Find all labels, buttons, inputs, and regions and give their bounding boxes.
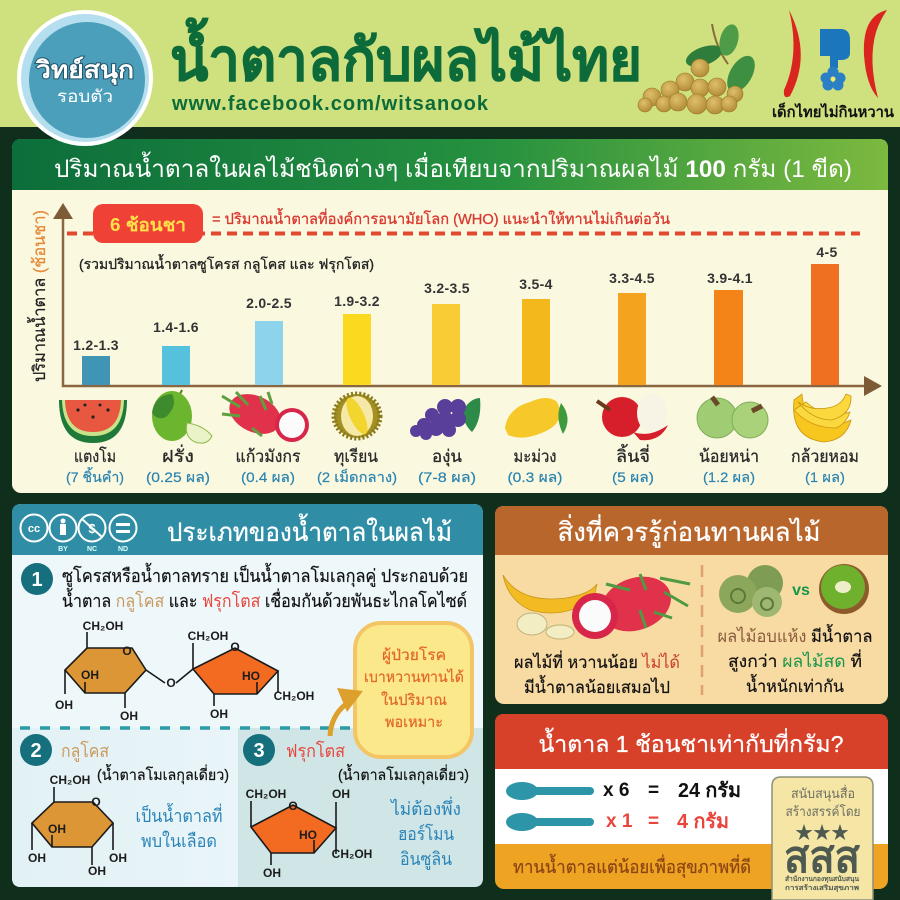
badge: ThaiHealth sponsor: สำนักงานกองทุนสนับสนุน <box>785 875 859 883</box>
chart: glucose structure: OH <box>109 851 127 865</box>
one teaspoon row: = <box>648 811 659 832</box>
badge: ThaiHealth sponsor: สนับสนุนสื่อ <box>791 785 855 802</box>
licence icons: NC <box>87 546 97 553</box>
chart: glucose structure: CH₂OH <box>50 773 90 787</box>
icon: dragon fruit <box>222 386 309 442</box>
chart: glucose structure: O <box>91 795 101 809</box>
licence icons: $ <box>88 521 96 536</box>
number badge 1 <box>21 563 53 595</box>
icon: custard apple <box>697 397 768 438</box>
logo: no sweet for Thai kids <box>772 10 895 121</box>
icon: durian <box>334 394 380 438</box>
fructose description: ไม่ต้องพึ่ง <box>389 796 461 819</box>
chart: fructose structure: HO <box>299 828 317 842</box>
glucose description <box>136 803 222 851</box>
divider <box>20 726 355 730</box>
fruit names and serving sizes: แก้วมังกร <box>236 447 300 466</box>
chart: fructose structure: CH₂OH <box>246 787 286 801</box>
title: น้ำตาลกับผลไม้ไทย <box>170 18 642 93</box>
website url: www.facebook.com/witsanook <box>171 93 489 115</box>
chart: sucrose structure: OH <box>81 668 99 682</box>
icon: lychee <box>597 393 668 440</box>
bar chart: 3.2-3.5 <box>424 280 470 296</box>
limit label: 6 teaspoons <box>93 204 203 243</box>
fructose description: อินซูลิน <box>400 849 452 870</box>
y-axis label: ปริมาณน้ำตาล (ช้อนชา) <box>27 210 49 382</box>
icon: watermelon <box>59 400 127 443</box>
teaspoon header <box>495 714 888 769</box>
chart: glucose structure: OH <box>28 851 46 865</box>
panel: sugar chart <box>12 139 888 493</box>
bar chart: 1.2-1.3 <box>73 337 119 353</box>
footer slogan: ทานน้ำตาลแต่น้อยเพื่อสุขภาพที่ดี <box>513 854 751 878</box>
sucrose description: น้ำตาล กลูโคส และ ฟรุกโตส เชื่อมกันด้วยพันธะไกลโคไซด์ <box>62 588 467 612</box>
fruit names and serving sizes: น้อยหน่า <box>699 447 759 466</box>
badge: ThaiHealth sponsor: การสร้างเสริมสุขภาพ <box>785 883 859 892</box>
number badge 2: 2 <box>30 740 42 762</box>
fruit names and serving sizes: แตงโม <box>74 446 116 466</box>
chart: glucose structure: OH <box>88 864 106 878</box>
chart: sucrose structure <box>55 619 314 723</box>
callout: diabetics <box>355 623 472 757</box>
fruit names and serving sizes: (0.4 ผล) <box>241 469 295 485</box>
heading: types of sugar: ประเภทของน้ำตาลในผลไม้ <box>167 513 452 547</box>
chart: fructose structure: OH <box>263 866 281 880</box>
icon: banana <box>794 394 851 442</box>
fruit names and serving sizes: (1.2 ผล) <box>703 469 755 485</box>
glucose description: พบในเลือด <box>141 830 217 851</box>
badge: ThaiHealth sponsor: สร้างสรรค์โดย <box>786 804 860 819</box>
bar chart: 4-5 <box>816 244 838 260</box>
badge: ThaiHealth sponsor: สสส <box>784 833 860 882</box>
icon: guava <box>152 390 212 443</box>
chart: sucrose structure: CH₂OH <box>188 629 228 643</box>
teaspoon header: น้ำตาล 1 ช้อนชาเท่ากับที่กรัม? <box>538 728 844 757</box>
panel: types of sugar in fruit <box>12 504 483 887</box>
icon: dried fruit <box>719 565 783 617</box>
bar chart: 1.9-3.2 <box>334 293 380 309</box>
callout: diabetics: พอเหมาะ <box>385 714 443 731</box>
callout: diabetics: ในปริมาณ <box>381 691 447 709</box>
chart: glucose structure <box>28 773 127 878</box>
sugar panel header <box>12 504 483 555</box>
glucose note: (น้ำตาลโมเลกุลเดี่ยว) <box>97 764 229 785</box>
chart: glucose structure: OH <box>48 822 66 836</box>
sucrose description <box>62 563 468 612</box>
badge: ThaiHealth sponsor: ★★★ <box>795 823 849 843</box>
licence icons: ND <box>118 546 128 553</box>
logo: witsanook badge: วิทย์สนุก <box>35 56 134 86</box>
WHO limit dashed line <box>67 232 860 236</box>
number badge 3 <box>243 734 275 766</box>
bar chart <box>73 244 839 385</box>
callout: diabetics: ผู้ป่วยโรค <box>382 646 446 664</box>
things-to-know header <box>495 506 888 555</box>
fruit names and serving sizes: (1 ผล) <box>805 469 845 485</box>
six teaspoons row: x 6 <box>603 780 629 801</box>
fruit names and serving sizes: ลิ้นจี่ <box>616 444 650 466</box>
section 3 background <box>238 728 483 887</box>
text: low-sweet fruit: มีน้ำตาลน้อยเสมอไป <box>524 675 670 697</box>
chart: fructose structure: OH <box>332 787 350 801</box>
arrow to callout <box>330 688 363 736</box>
text: dried fruit sugar: น้ำหนักเท่ากัน <box>746 674 844 696</box>
chart: fructose structure: CH₂OH <box>332 847 372 861</box>
chart: sucrose structure: HO <box>242 669 260 683</box>
icon: longan fruit cluster <box>638 22 761 114</box>
chart: sucrose structure: OH <box>55 698 73 712</box>
white body <box>495 769 888 844</box>
bar chart: 2.0-2.5 <box>246 295 292 311</box>
limit label: 6 teaspoons: 6 ช้อนชา <box>110 215 186 235</box>
panel: things to know before eating fruit <box>495 506 888 704</box>
logo: witsanook badge <box>17 10 153 146</box>
one teaspoon row: x 1 <box>606 811 633 832</box>
chart: sucrose structure: O <box>122 644 132 658</box>
bar chart: 3.3-4.5 <box>609 270 655 286</box>
text: low-sweet fruit: ผลไม้ที่ หวานน้อย ไม่ได้ <box>514 650 680 672</box>
text: dried fruit sugar: ผลไม้อบแห้ง มีน้ำตาล <box>718 624 872 646</box>
bar chart: 3.5-4 <box>519 276 553 292</box>
fructose note: (น้ำตาลโมเลกุลเดี่ยว) <box>338 764 469 785</box>
number badge 1: 1 <box>31 569 43 591</box>
fruit names and serving sizes: มะม่วง <box>514 447 556 466</box>
fruit names and serving sizes: (0.25 ผล) <box>146 469 210 485</box>
glucose heading: กลูโคส <box>61 740 109 762</box>
text: dried fruit sugar: สูงกว่า ผลไม้สด ที่ <box>728 649 862 672</box>
licence icons <box>20 514 136 553</box>
glucose description: เป็นน้ำตาลที่ <box>136 803 222 826</box>
header band <box>0 0 900 127</box>
fruit names and serving sizes: (5 ผล) <box>612 469 654 485</box>
fruit names and serving sizes: (0.3 ผล) <box>508 469 562 485</box>
logo: witsanook badge: รอบตัว <box>57 87 113 106</box>
six teaspoons row: 24 กรัม <box>678 780 741 802</box>
fruit names and serving sizes: ฝรั่ง <box>162 444 194 466</box>
chart: fructose structure: O <box>288 799 298 813</box>
text: low-sweet fruit <box>514 650 680 697</box>
one teaspoon row: 4 กรัม <box>677 811 729 833</box>
icon: grapes <box>410 398 480 440</box>
divider <box>701 565 703 695</box>
fruit names and serving sizes: (7 ชิ้นคำ) <box>66 467 124 485</box>
chart: sucrose structure: O <box>230 640 240 654</box>
icon: kiwi <box>819 564 869 614</box>
chart: sucrose structure: CH₂OH <box>83 619 123 633</box>
number badge 3: 3 <box>253 740 265 762</box>
fruit names and serving sizes: ทุเรียน <box>334 447 378 467</box>
licence icons: cc <box>28 523 40 535</box>
fruit names and serving sizes <box>66 444 859 485</box>
six teaspoons row <box>506 780 741 802</box>
chart: sucrose structure: OH <box>210 707 228 721</box>
fructose description <box>389 796 461 870</box>
fructose heading: ฟรุกโตส <box>286 740 345 762</box>
WHO recommendation note: = ปริมาณน้ำตาลที่องค์การอนามัยโลก (WHO) แนะนำให้ทานไม่เกินต่อวัน <box>212 208 670 228</box>
chart: fructose structure <box>246 787 372 880</box>
one teaspoon row <box>506 811 729 833</box>
badge: ThaiHealth sponsor <box>772 777 873 900</box>
bar chart: 1.4-1.6 <box>153 319 199 335</box>
chart: sucrose structure: CH₂OH <box>274 689 314 703</box>
callout: diabetics: เบาหวานทานได้ <box>364 668 464 686</box>
text: dried fruit sugar <box>718 624 872 696</box>
panel: sugar per teaspoon <box>495 714 888 900</box>
fruit names and serving sizes: องุ่น <box>432 447 462 467</box>
fruit names and serving sizes: กล้วยหอม <box>791 447 859 466</box>
icon: banana and dragon fruit <box>503 567 690 641</box>
logo: no sweet for Thai kids: เด็กไทยไม่กินหวาน <box>772 102 895 121</box>
fructose description: ฮอร์โมน <box>398 823 454 844</box>
chart header: ปริมาณน้ำตาลในผลไม้ชนิดต่างๆ เมื่อเทียบจากปริมาณผลไม้ 100 กรัม (1 ขีด) <box>54 151 852 183</box>
chart note: (รวมปริมาณน้ำตาลซูโครส กลูโคส และ ฟรุกโตส) <box>79 254 374 273</box>
chart: sucrose structure: O <box>166 676 176 690</box>
number badge 2 <box>20 734 52 766</box>
chart header <box>12 139 888 190</box>
fruit names and serving sizes: (7-8 ผล) <box>418 469 476 485</box>
things-to-know header: สิ่งที่ควรรู้ก่อนทานผลไม้ <box>558 514 820 548</box>
chart: sucrose structure: OH <box>120 709 138 723</box>
six teaspoons row: = <box>648 780 659 801</box>
sucrose description: ซูโครสหรือน้ำตาลทราย เป็นน้ำตาลโมเลกุลคู่ ประกอบด้วย <box>62 563 468 587</box>
icon: mango <box>505 398 568 438</box>
axes <box>53 203 882 396</box>
vs label: vs <box>792 582 810 599</box>
fruit names and serving sizes: (2 เม็ดกลาง) <box>317 468 397 485</box>
section 2 background <box>12 728 238 887</box>
licence icons: BY <box>58 546 68 553</box>
bar chart: 3.9-4.1 <box>707 270 753 286</box>
